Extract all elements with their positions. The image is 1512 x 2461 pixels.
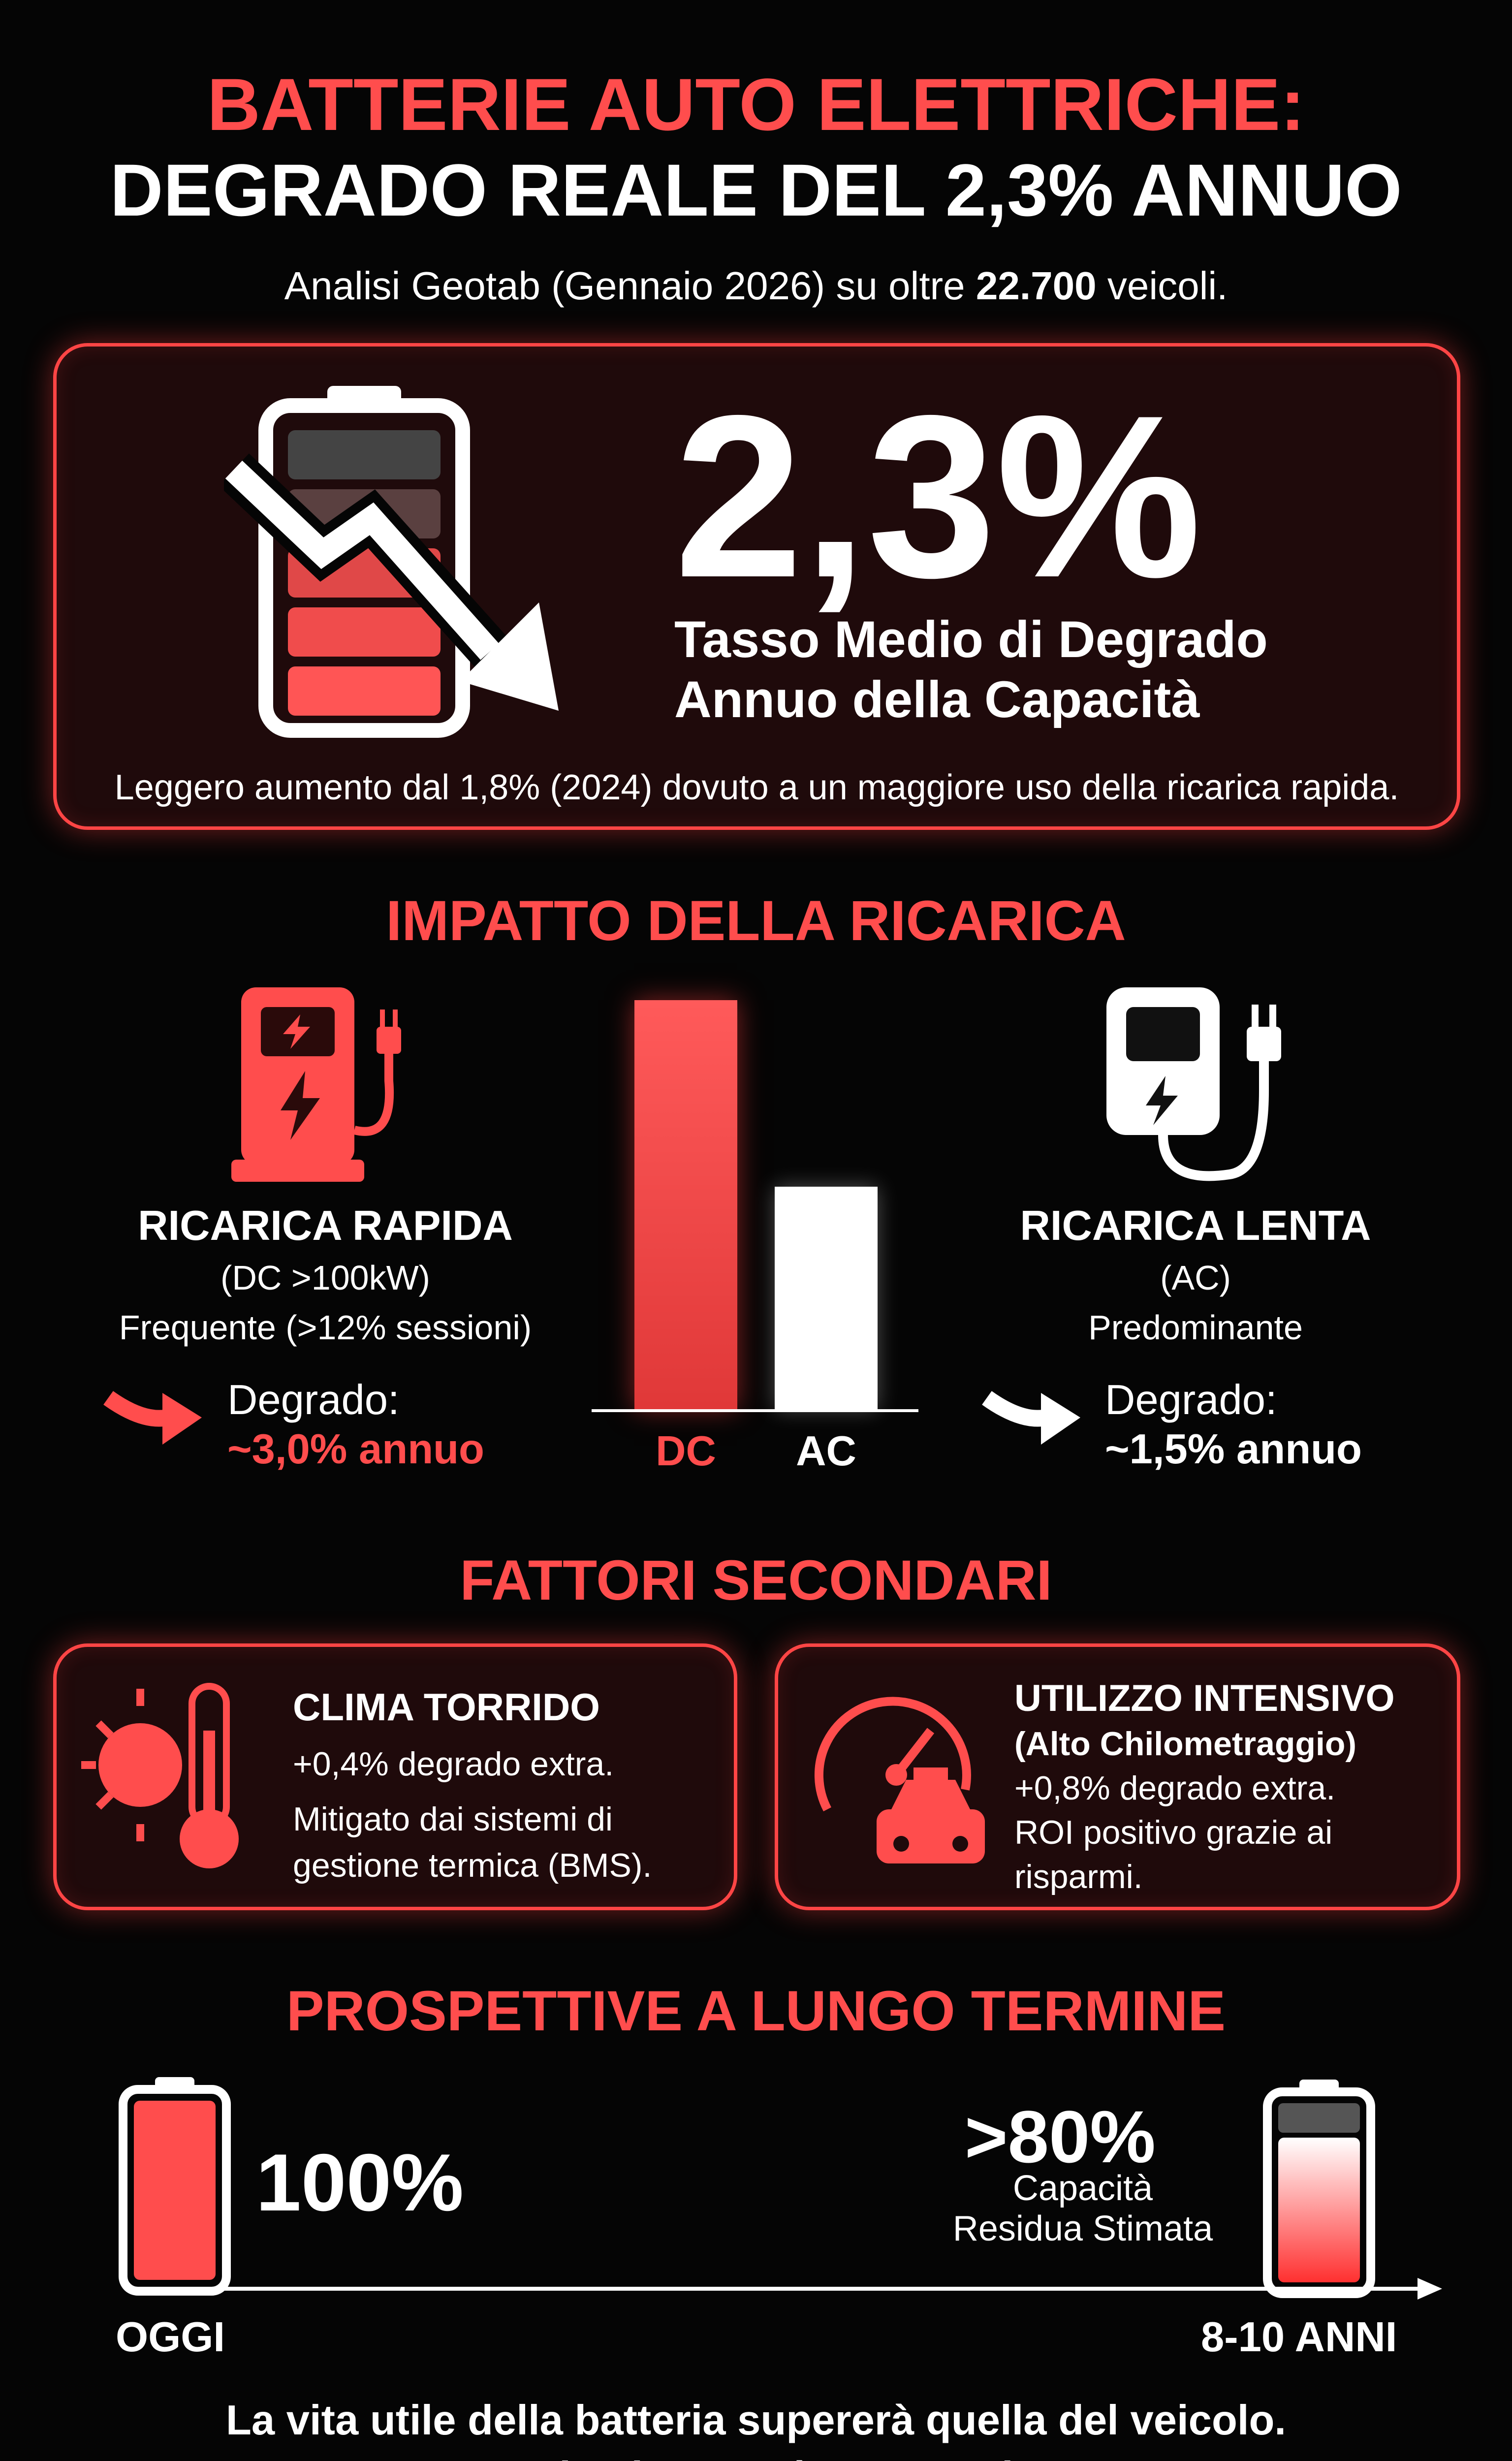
fast charge text: RICARICA RAPIDA [138,1202,513,1249]
label capacita: Residua Stimata [953,2209,1213,2248]
fast charge text [119,1202,532,1347]
icon: fast charger [231,987,401,1182]
heading: prospettive: PROSPETTIVE A LUNGO TERMINE [286,1980,1226,2043]
icon: sun thermometer [81,1683,239,1868]
fast degrade: Degrado: [227,1377,400,1423]
text: clima: gestione termica (BMS). [293,1847,652,1884]
conclusion: La vita utile della batteria supererà quella del veicolo. [226,2397,1286,2444]
text: clima: +0,4% degrado extra. [293,1745,614,1783]
label >80%: >80% [965,2095,1156,2178]
fast degrade [227,1377,484,1473]
arrow: red [103,1391,202,1445]
text: clima [293,1685,652,1884]
title: BATTERIE AUTO ELETTRICHE: [207,63,1305,146]
stat label [674,611,1268,728]
panel: main stat [53,343,1460,830]
timeline [0,2067,1512,2372]
stat label: Annuo della Capacità [674,671,1200,728]
conclusion [0,2392,1512,2461]
slow degrade: Degrado: [1105,1377,1277,1423]
label 8-10 anni: 8-10 ANNI [1201,2314,1397,2361]
text: utilizzo: risparmi. [1014,1858,1143,1895]
icon: slow charger [1106,987,1281,1181]
slow charge text: Predominante [1088,1308,1303,1347]
icon: battery 80 [1262,2080,1376,2299]
big stat: 2,3% [674,367,1201,626]
fast charge text: (DC >100kW) [220,1259,430,1297]
icon: battery with down arrow [224,386,559,738]
slow charge text: RICARICA LENTA [1020,1202,1371,1249]
title: DEGRADO REALE DEL 2,3% ANNUO [110,149,1402,231]
heading: fattori: FATTORI SECONDARI [460,1549,1052,1612]
fast degrade: ~3,0% annuo [227,1426,484,1473]
label capacita [886,2168,1280,2249]
stat label: Tasso Medio di Degrado [674,611,1268,668]
icon: full battery [118,2077,231,2296]
text: utilizzo [1014,1676,1395,1899]
text: utilizzo: ROI positivo grazie ai [1014,1814,1332,1851]
slow charge text [1020,1202,1371,1347]
bar chart: AC [796,1428,856,1475]
label capacita: Capacità [1013,2169,1153,2208]
heading: impatto: IMPATTO DELLA RICARICA [386,889,1126,952]
bar chart: DC [656,1428,716,1475]
fast charge text: Frequente (>12% sessioni) [119,1308,532,1347]
text: utilizzo: UTILIZZO INTENSIVO [1014,1677,1395,1719]
arrow: white [982,1391,1080,1445]
label oggi: OGGI [116,2314,225,2361]
panel: clima [53,1643,737,1910]
slow charge text: (AC) [1160,1259,1231,1297]
bar chart [592,981,918,1475]
text: clima: CLIMA TORRIDO [293,1685,600,1729]
text: utilizzo: +0,8% degrado extra. [1014,1769,1335,1807]
slow degrade [1105,1377,1362,1473]
title [110,63,1402,231]
icon: speedometer taxi [808,1681,1005,1878]
arrow line [177,2274,1447,2303]
text: utilizzo: (Alto Chilometraggio) [1014,1725,1356,1763]
panel: utilizzo [775,1643,1460,1910]
subtitle: Analisi Geotab (Gennaio 2026) su oltre 22.700 veicoli. [284,264,1228,308]
slow degrade: ~1,5% annuo [1105,1426,1362,1473]
label 100%: 100% [256,2137,464,2228]
text: clima: Mitigato dai sistemi di [293,1800,613,1838]
footnote: Leggero aumento dal 1,8% (2024) dovuto a un maggiore uso della ricarica rapida. [115,768,1399,807]
